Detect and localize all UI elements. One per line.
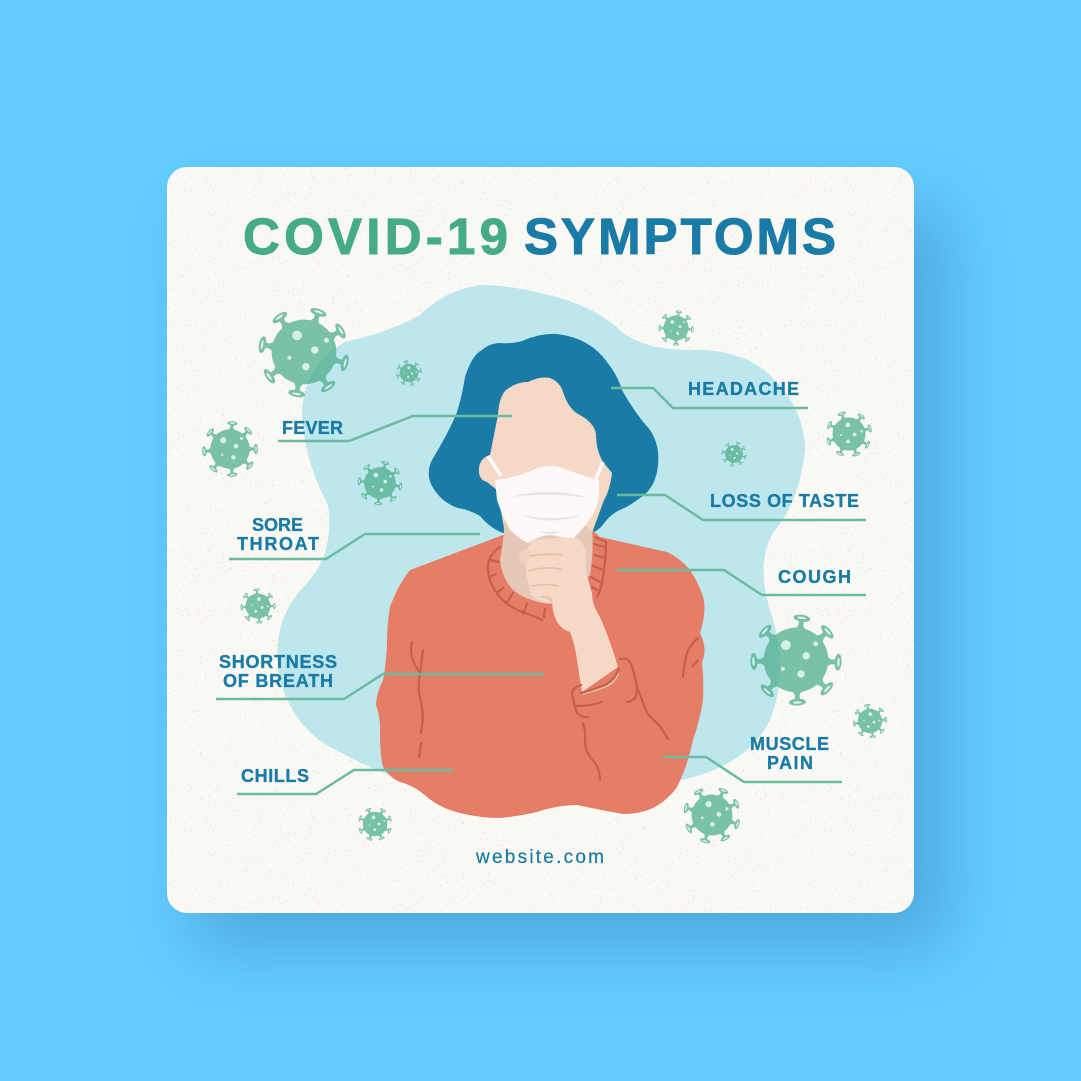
label: shortness of breath xyxy=(216,652,544,699)
label: cough: COUGH xyxy=(778,567,851,587)
label: headache xyxy=(611,379,808,408)
collar ribbing xyxy=(488,537,606,620)
virus: top left large xyxy=(258,306,350,398)
label: sore throat: SORE xyxy=(252,515,303,535)
virus: lower right large xyxy=(741,606,851,715)
label: shortness of breath: SHORTNESS xyxy=(219,652,337,672)
sweater xyxy=(376,530,705,818)
face mask xyxy=(495,466,599,543)
label: shortness of breath: OF BREATH xyxy=(223,671,333,691)
coughing arm and hand xyxy=(519,538,619,695)
card shadow xyxy=(190,205,950,950)
virus: bottom right xyxy=(680,784,744,847)
label: headache: HEADACHE xyxy=(688,379,799,399)
label: muscle pain: MUSCLE xyxy=(750,734,829,754)
face and neck xyxy=(479,378,612,533)
background blob xyxy=(277,285,805,790)
label: fever: FEVER xyxy=(282,418,343,438)
label: sore throat: THROAT xyxy=(237,534,319,554)
hair xyxy=(429,334,658,533)
label: cough xyxy=(617,567,866,595)
label: chills xyxy=(237,766,453,794)
title xyxy=(243,208,836,265)
label: sore throat xyxy=(229,515,480,559)
neck shadow xyxy=(500,515,593,604)
sweater creases xyxy=(411,638,698,780)
title: SYMPTOMS xyxy=(524,208,836,265)
label: muscle pain: PAIN xyxy=(767,753,813,773)
label: muscle pain xyxy=(663,734,842,782)
mask straps xyxy=(488,456,603,479)
label: fever xyxy=(278,416,512,441)
virus: beside hair xyxy=(355,459,405,508)
title: COVID-19 xyxy=(243,208,508,265)
label: chills: CHILLS xyxy=(241,766,309,786)
virus: upper centre small xyxy=(392,356,426,390)
website footer: website.com xyxy=(475,847,604,868)
virus: left xyxy=(195,415,265,484)
virus: left middle xyxy=(233,582,282,631)
virus: top right xyxy=(655,307,697,349)
virus: far right xyxy=(847,698,893,744)
virus: bottom left xyxy=(355,804,395,844)
virus: right xyxy=(820,405,878,463)
label: loss of taste xyxy=(617,491,866,520)
card panel xyxy=(167,167,914,913)
virus: right small xyxy=(721,441,747,467)
person xyxy=(376,334,705,818)
label: loss of taste: LOSS OF TASTE xyxy=(710,491,859,511)
